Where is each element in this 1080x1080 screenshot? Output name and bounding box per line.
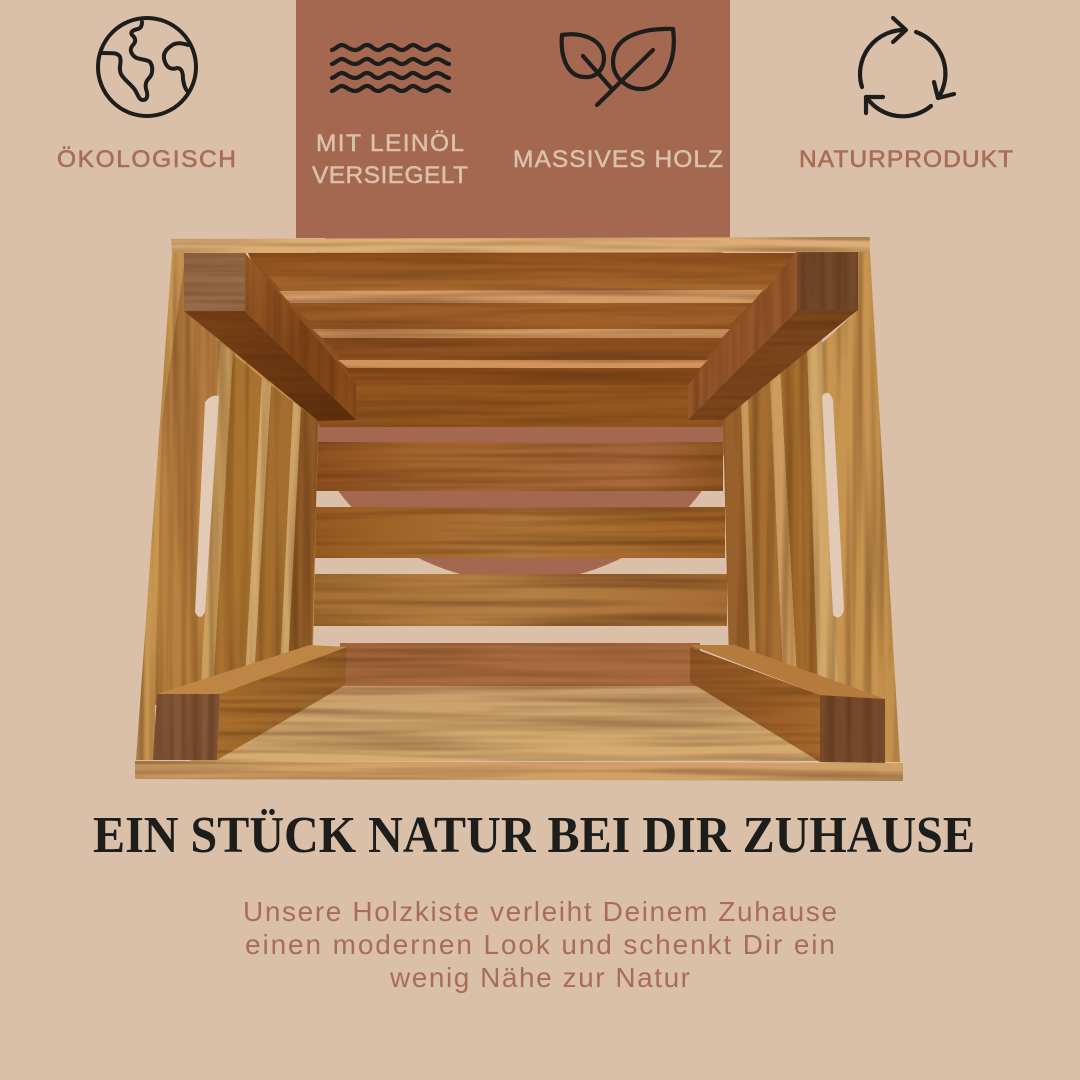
floor [190, 686, 845, 761]
lower right beam [690, 645, 885, 763]
icon: recycling arrows [860, 18, 954, 116]
description text [243, 896, 837, 993]
back wall slats [309, 385, 727, 686]
left side handle cut-out [195, 396, 219, 617]
top rail [171, 237, 870, 253]
label: Naturprodukt: NATURPRODUKT [799, 146, 1013, 173]
right side handle cut-out [822, 393, 844, 618]
terracotta circle behind crate [293, 128, 747, 582]
bottom rail [135, 761, 903, 781]
icon: leaves [562, 29, 674, 105]
right side wall [723, 252, 900, 762]
upper right beam [688, 251, 858, 420]
icon: waves [332, 45, 449, 91]
upper left beam [184, 253, 356, 421]
lower left beam [153, 645, 347, 760]
label: Mit Leinöl versiegelt: MIT LEINÖL [316, 130, 464, 157]
left side wall [136, 253, 318, 760]
description text: Unsere Holzkiste verleiht Deinem Zuhause [243, 896, 837, 927]
label: Massives Holz: MASSIVES HOLZ [513, 146, 723, 173]
wooden crate [135, 237, 903, 781]
label: Ökologisch: ÖKOLOGISCH [57, 146, 236, 173]
label: Mit Leinöl versiegelt [312, 130, 468, 189]
label: Mit Leinöl versiegelt: VERSIEGELT [312, 162, 468, 189]
ceiling slats [248, 253, 797, 385]
description text: einen modernen Look und schenkt Dir ein [245, 929, 835, 960]
description text: wenig Nähe zur Natur [389, 962, 690, 993]
title: EIN STÜCK NATUR BEI DIR ZUHAUSE [93, 807, 975, 864]
terracotta header panel [296, 0, 730, 238]
ceiling backing [248, 253, 797, 427]
icon: globe [98, 18, 196, 116]
